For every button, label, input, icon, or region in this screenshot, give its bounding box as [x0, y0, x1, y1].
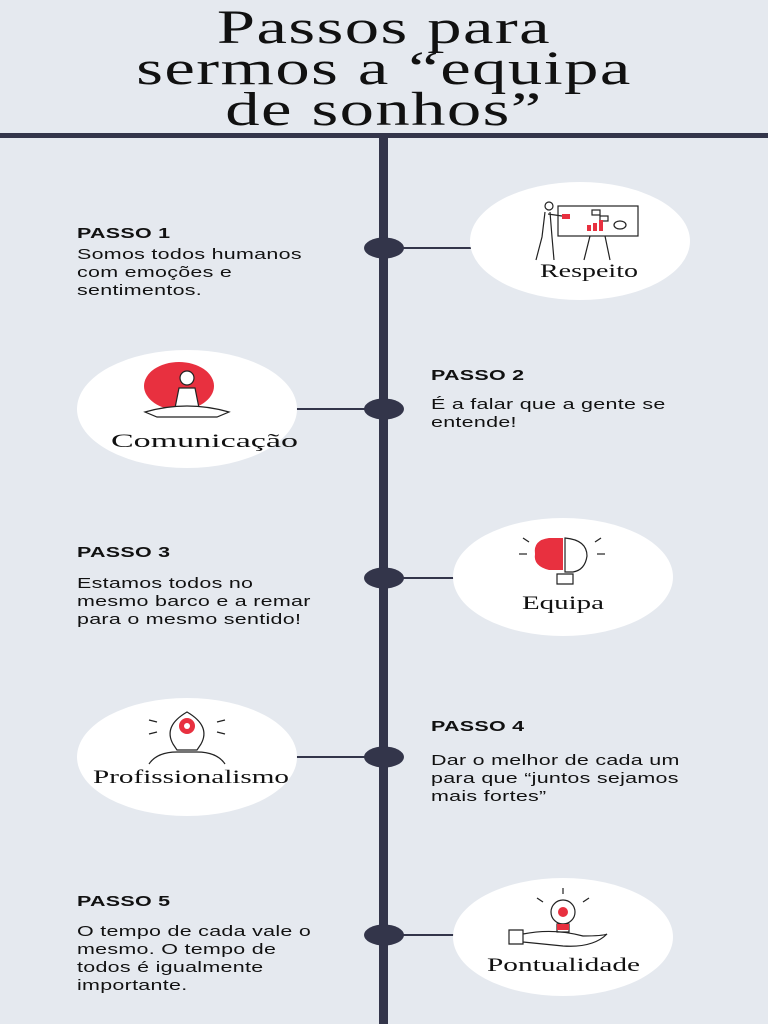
- text: passo 3: PASSO 3: [77, 544, 170, 561]
- text: passo 3: mesmo barco e a remar: [77, 593, 311, 610]
- text: passo 1: Somos todos humanos: [77, 246, 302, 263]
- text: passo 1: sentimentos.: [77, 282, 202, 299]
- text: passo 3: [77, 544, 311, 628]
- icon: gear head: [149, 712, 225, 764]
- text: passo 5: PASSO 5: [77, 893, 170, 910]
- text: passo 2: PASSO 2: [431, 367, 524, 384]
- icon: hand bulb: [509, 888, 607, 946]
- panel: Comunicação: [77, 350, 297, 468]
- panel: Comunicação: Comunicação: [111, 431, 297, 452]
- panel: Profissionalismo: [77, 698, 297, 816]
- title: de sonhos”: [225, 83, 543, 136]
- icon: meditation: [144, 362, 214, 410]
- icon: brain bulb: [535, 538, 563, 570]
- text: passo 1: [77, 225, 302, 299]
- text: passo 5: [77, 893, 311, 994]
- text: passo 3: Estamos todos no: [77, 575, 253, 592]
- title: Passos para: [217, 1, 551, 54]
- text: passo 1: com emoções e: [77, 264, 232, 281]
- icon: presenter: [536, 202, 638, 260]
- text: passo 5: todos é igualmente: [77, 959, 263, 976]
- panel: Respeito: [470, 182, 690, 300]
- text: passo 2: [431, 367, 666, 431]
- panel: Respeito: Respeito: [540, 261, 638, 282]
- text: passo 4: PASSO 4: [431, 718, 524, 735]
- text: passo 2: entende!: [431, 414, 517, 431]
- text: passo 4: Dar o melhor de cada um: [431, 752, 680, 769]
- text: passo 3: para o mesmo sentido!: [77, 611, 301, 628]
- text: passo 5: mesmo. O tempo de: [77, 941, 276, 958]
- text: passo 4: para que “juntos sejamos: [431, 770, 679, 787]
- panel: Equipa: [453, 518, 673, 636]
- title: sermos a “equipa: [136, 42, 632, 95]
- panel: Pontualidade: [453, 878, 673, 996]
- text: passo 5: importante.: [77, 977, 187, 994]
- text: passo 5: O tempo de cada vale o: [77, 923, 311, 940]
- text: passo 1: PASSO 1: [77, 225, 170, 242]
- title: [136, 1, 632, 136]
- panel: Equipa: Equipa: [522, 593, 605, 614]
- text: passo 4: [431, 718, 680, 805]
- panel: Profissionalismo: Profissionalismo: [93, 767, 289, 788]
- text: passo 2: É a falar que a gente se: [431, 396, 666, 413]
- panel: Pontualidade: Pontualidade: [487, 955, 640, 976]
- text: passo 4: mais fortes”: [431, 788, 546, 805]
